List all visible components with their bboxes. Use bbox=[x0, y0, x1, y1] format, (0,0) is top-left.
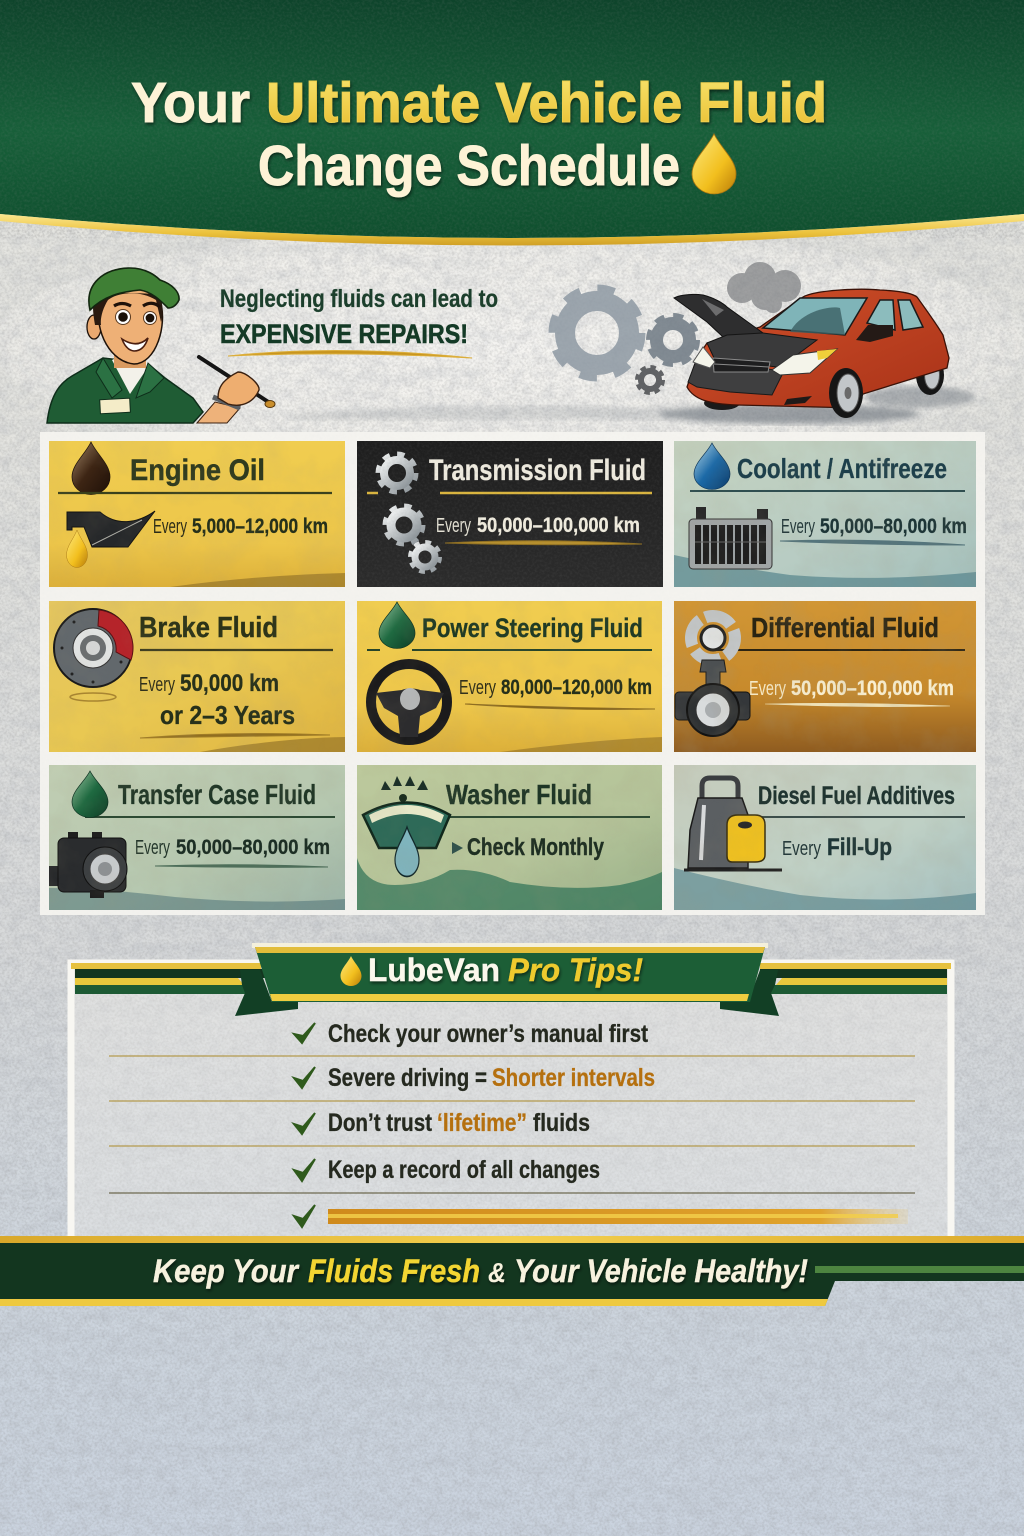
card: Engine Oil bbox=[49, 441, 345, 587]
car side windows bbox=[867, 300, 923, 330]
header band bbox=[0, 0, 1024, 246]
ribbon heading: LubeVan bbox=[368, 952, 500, 988]
title: Your bbox=[131, 71, 250, 135]
icon: title oil drop bbox=[692, 134, 736, 194]
card: Brake Fluid: Every bbox=[139, 674, 175, 696]
tip: blank gold bar bbox=[294, 1205, 908, 1227]
icon: green drop bbox=[72, 771, 108, 818]
icon: oil drop bbox=[72, 442, 110, 494]
title bbox=[131, 71, 827, 198]
card: Engine Oil: 5,000–12,000 km bbox=[192, 515, 328, 538]
footer slogan bbox=[153, 1253, 808, 1289]
card: Brake Fluid: or 2–3 Years bbox=[160, 700, 295, 730]
card: Differential Fluid: 50,000–100,000 km bbox=[791, 677, 954, 700]
card: Brake Fluid: 50,000 km bbox=[180, 670, 279, 697]
card: Differential Fluid: Every bbox=[749, 678, 786, 700]
card: Transfer Case Fluid: Every bbox=[135, 837, 170, 859]
tip: keep a record: Keep a record of all changes bbox=[328, 1156, 600, 1184]
card: Transfer Case Fluid: 50,000–80,000 km bbox=[176, 836, 330, 859]
car windshield bbox=[763, 298, 867, 335]
icon: brake disc bbox=[54, 609, 133, 701]
icon: windshield washer bbox=[363, 776, 450, 876]
card: Transmission Fluid: 50,000–100,000 km bbox=[477, 514, 640, 537]
tip divider lines bbox=[109, 1056, 915, 1146]
footer banner bbox=[0, 1236, 1024, 1306]
front wheel bbox=[829, 368, 863, 418]
car mirror bbox=[856, 325, 893, 342]
warning text: EXPENSIVE REPAIRS! bbox=[220, 319, 468, 349]
tip: owner's manual: Check your owner’s manual first bbox=[328, 1020, 649, 1048]
mechanic cap bbox=[89, 268, 179, 310]
mechanic arm and hand bbox=[197, 357, 275, 423]
card: Engine Oil: Every bbox=[153, 516, 187, 538]
footer slogan: & bbox=[488, 1257, 506, 1288]
mechanic name badge bbox=[100, 398, 130, 414]
tip: severe driving bbox=[294, 1064, 655, 1092]
card: Coolant / Antifreeze bbox=[674, 441, 976, 587]
right ribbon stripes bbox=[760, 963, 951, 994]
right ribbon tail bbox=[720, 970, 779, 1016]
title: Ultimate Vehicle Fluid bbox=[266, 71, 827, 135]
white grid panel bbox=[40, 432, 985, 915]
card: Coolant / Antifreeze: 50,000–80,000 km bbox=[820, 515, 967, 538]
icon: differential bbox=[675, 616, 750, 736]
car grille and bumper bbox=[688, 358, 783, 395]
left ribbon tail bbox=[235, 970, 298, 1016]
engine bay bbox=[707, 333, 817, 367]
card: Differential Fluid bbox=[674, 601, 976, 752]
card: Transmission Fluid: Transmission Fluid bbox=[429, 454, 646, 487]
card: Washer Fluid bbox=[357, 765, 662, 910]
card: Transmission Fluid bbox=[357, 441, 663, 587]
card: Diesel Fuel Additives: Every bbox=[782, 838, 821, 860]
icon: steering wheel bbox=[371, 664, 447, 740]
card: Washer Fluid: Check Monthly bbox=[467, 834, 605, 861]
card: Brake Fluid: Brake Fluid bbox=[139, 612, 278, 644]
car tire front-left bbox=[704, 396, 740, 410]
icon: arrow bbox=[452, 842, 463, 854]
warning text bbox=[220, 285, 498, 358]
card texture overlay bbox=[49, 441, 976, 910]
tip: severe driving: Severe driving = bbox=[328, 1064, 487, 1092]
mechanic illustration bbox=[47, 268, 275, 423]
mechanic head bbox=[87, 288, 163, 368]
card: Power Steering Fluid: 80,000–120,000 km bbox=[501, 676, 652, 699]
footer slogan: Your Vehicle Healthy! bbox=[514, 1253, 808, 1289]
warning text: Neglecting fluids can lead to bbox=[220, 285, 498, 313]
icon: transfer case bbox=[49, 832, 127, 898]
icon: green drop bbox=[379, 602, 415, 648]
panel: pro tips bbox=[71, 943, 951, 1253]
card: Power Steering Fluid: Power Steering Fluid bbox=[422, 613, 643, 643]
card: Power Steering Fluid: Every bbox=[459, 677, 496, 699]
card: Diesel Fuel Additives: Fill-Up bbox=[827, 834, 892, 861]
card: Diesel Fuel Additives: Diesel Fuel Additives bbox=[758, 782, 955, 810]
icon: yellow drop bbox=[66, 530, 88, 568]
card: Power Steering Fluid bbox=[357, 601, 662, 752]
headlights bbox=[772, 349, 837, 375]
tip: lifetime fluids bbox=[294, 1109, 590, 1137]
title: Change Schedule bbox=[258, 134, 680, 198]
smoke bbox=[727, 262, 801, 313]
card: Engine Oil: Engine Oil bbox=[130, 454, 265, 487]
card: Transmission Fluid: Every bbox=[436, 515, 471, 537]
ribbon heading: Pro Tips! bbox=[508, 952, 643, 988]
card: Diesel Fuel Additives bbox=[674, 765, 976, 910]
icon: radiator battery bbox=[689, 507, 772, 569]
mechanic body bbox=[47, 358, 203, 423]
icon: drop bbox=[340, 956, 362, 986]
grid of fluid cards bbox=[49, 441, 976, 910]
car body bbox=[687, 289, 949, 408]
tip: lifetime fluids: ‘lifetime” bbox=[437, 1109, 527, 1137]
gears illustration bbox=[553, 289, 697, 393]
ribbon centre bbox=[252, 943, 768, 1002]
icon: additive bottles bbox=[684, 778, 782, 870]
card: Coolant / Antifreeze: Every bbox=[781, 516, 815, 538]
tip: lifetime fluids: Don’t trust bbox=[328, 1109, 433, 1137]
ground shadow bbox=[290, 386, 975, 424]
card: Coolant / Antifreeze: Coolant / Antifreeze bbox=[737, 453, 947, 484]
car illustration bbox=[674, 289, 949, 418]
ribbon heading bbox=[368, 952, 643, 988]
icon: oil can bbox=[67, 511, 155, 547]
footer slogan: Keep Your bbox=[153, 1253, 299, 1289]
card: Brake Fluid bbox=[49, 601, 345, 752]
icon: blue drop bbox=[694, 443, 730, 490]
card: Differential Fluid: Differential Fluid bbox=[751, 612, 939, 643]
tip: lifetime fluids: fluids bbox=[533, 1109, 590, 1137]
gold swoosh underline bbox=[228, 350, 472, 358]
left ribbon stripes bbox=[71, 963, 265, 994]
icon: gears bbox=[378, 454, 440, 572]
card: Transfer Case Fluid: Transfer Case Fluid bbox=[118, 779, 316, 810]
tip: severe driving: Shorter intervals bbox=[492, 1064, 655, 1092]
card: Transfer Case Fluid bbox=[49, 765, 345, 910]
footer slogan: Fluids Fresh bbox=[308, 1253, 480, 1289]
open hood bbox=[674, 294, 763, 337]
car rear wheel bbox=[916, 355, 944, 395]
card: Washer Fluid: Washer Fluid bbox=[446, 779, 592, 810]
